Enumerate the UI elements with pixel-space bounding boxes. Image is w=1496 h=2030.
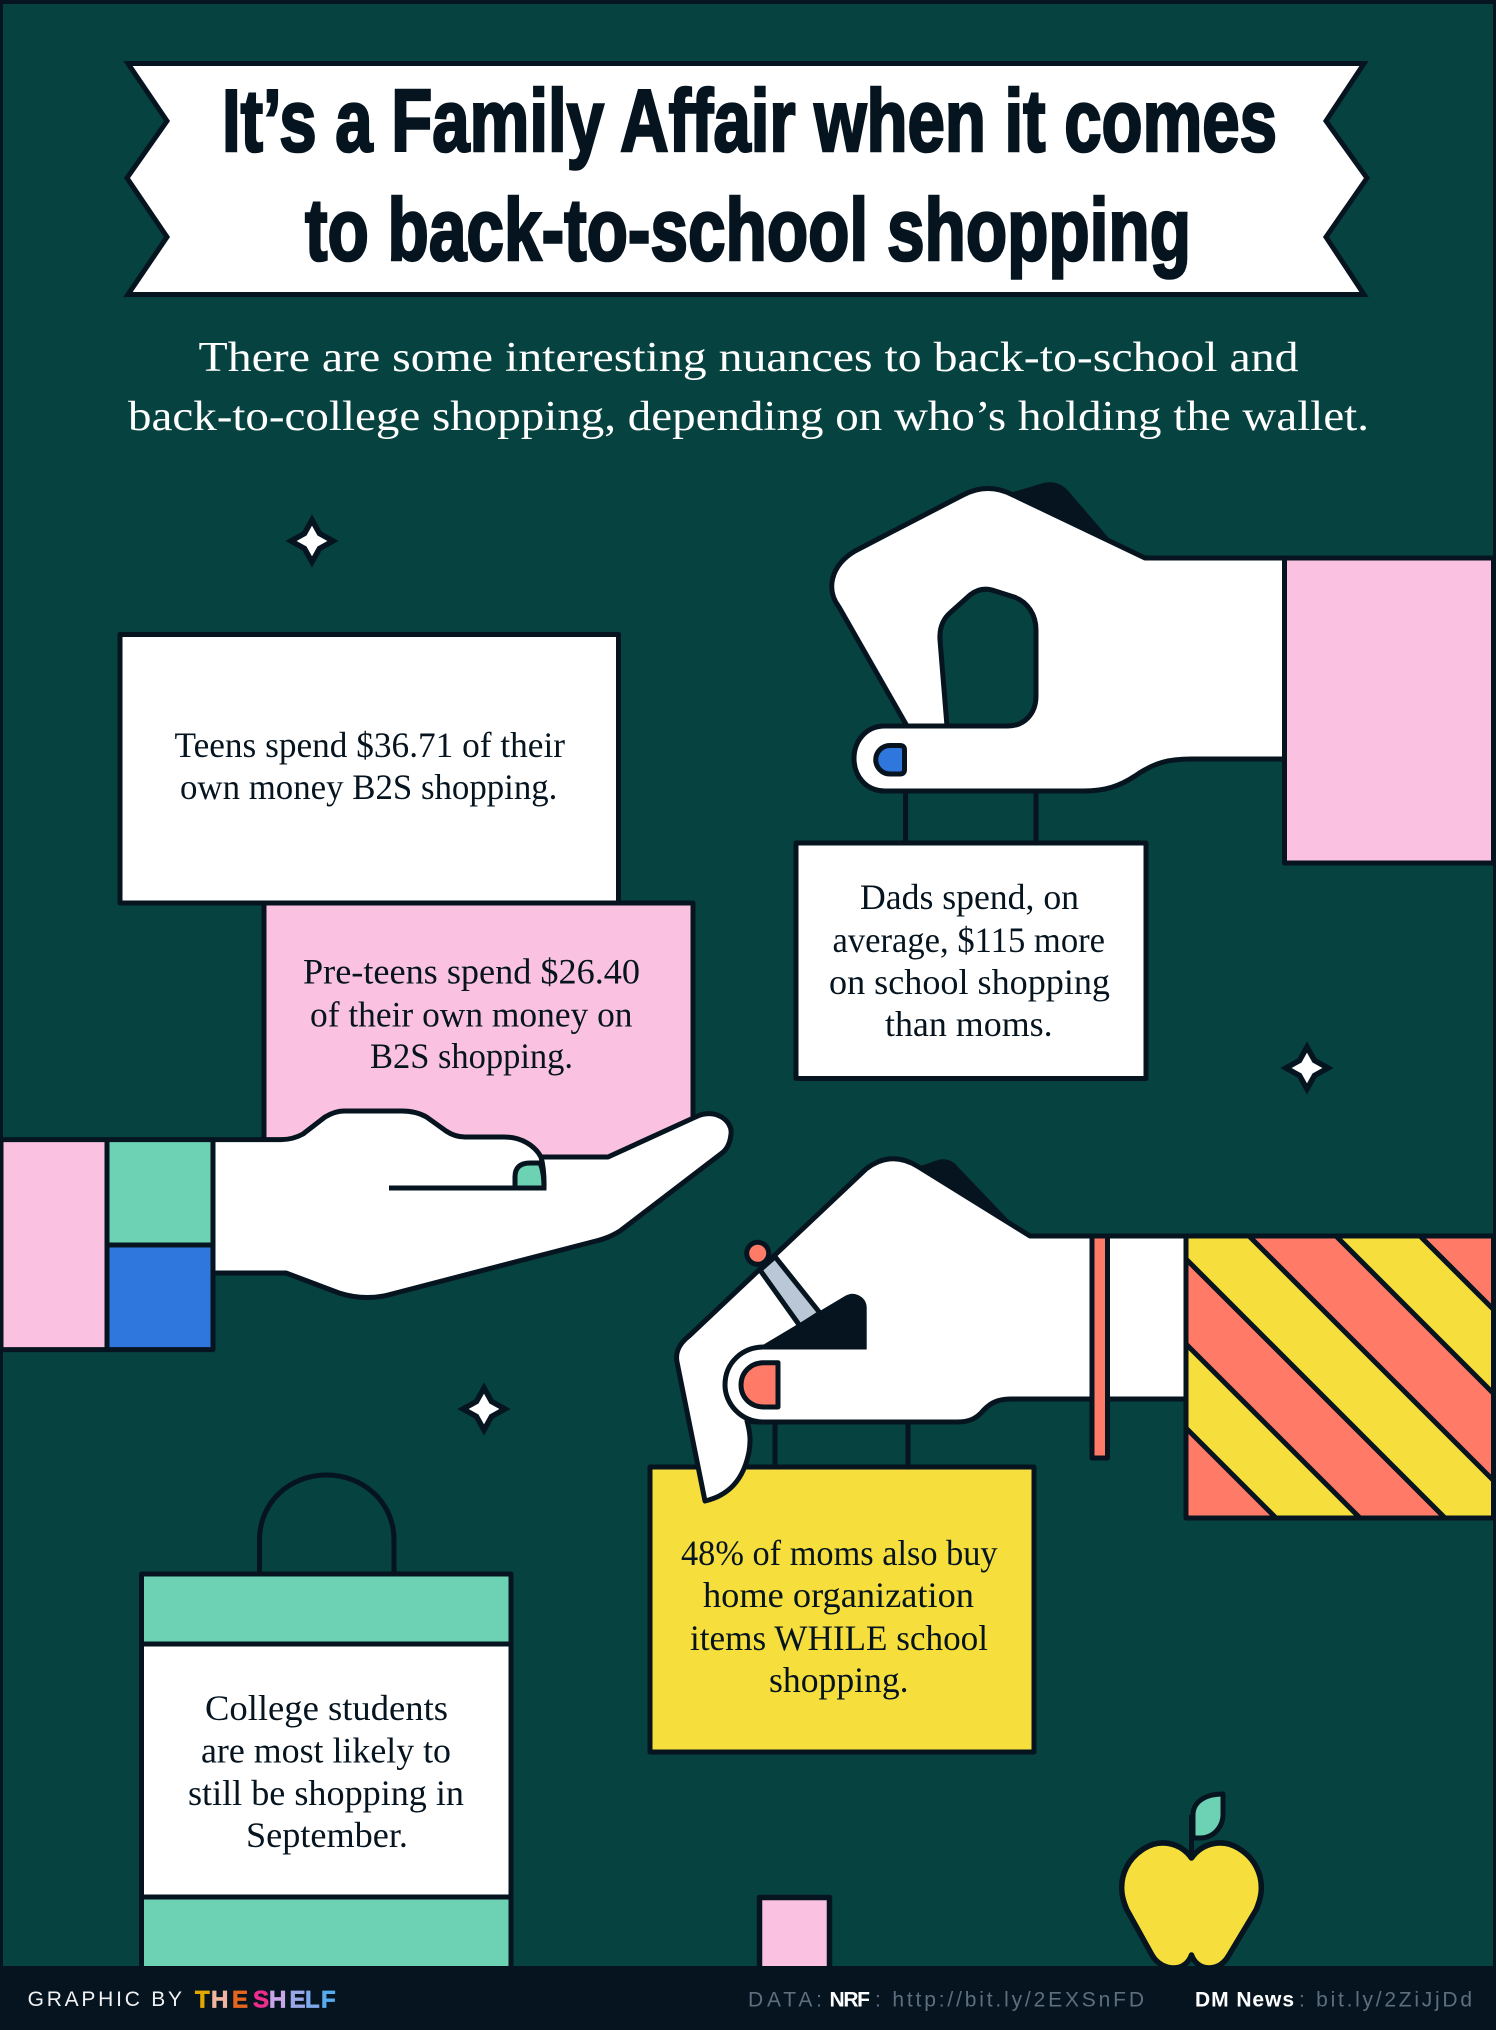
- icon: strings from dad's hand: [906, 788, 1036, 842]
- source: DM News: DM News: [1195, 1988, 1294, 2012]
- hand: [832, 488, 1284, 791]
- logo: the shelf: H: [211, 1986, 228, 2014]
- hand: [677, 1159, 1186, 1501]
- text: pre-teens: Pre-teens spend $26.40: [303, 952, 640, 992]
- icon: sparkle top left: [291, 520, 333, 562]
- text: college students: [188, 1688, 464, 1855]
- cuff: pink, green and blue: [1, 1140, 213, 1350]
- icon: shopping bag: [142, 1475, 511, 1971]
- text: pre-teens: [303, 952, 640, 1076]
- knuckle shadow: [918, 1159, 1022, 1234]
- cuff: pink sleeve top right: [1284, 558, 1494, 863]
- text: teens: [174, 725, 565, 807]
- title text: to back-to-school shopping: [305, 180, 1191, 279]
- icon: mom's hand with ring: [677, 1159, 1186, 1501]
- source: NRF: : http://bit.ly/2EXSnFD: [875, 1988, 1144, 2012]
- text: college students: are most likely to: [201, 1730, 451, 1770]
- subtitle: There are some interesting nuances to back-to-school and: [198, 335, 1298, 381]
- text: college students: College students: [205, 1688, 448, 1728]
- footer: [0, 1966, 1496, 2030]
- ring stone: [747, 1242, 769, 1264]
- credit: [28, 1986, 336, 2014]
- title banner: [127, 64, 1367, 294]
- logo: the shelf: L: [305, 1986, 320, 2014]
- text: moms: home organization: [703, 1575, 974, 1615]
- source: DM News: [1195, 1988, 1472, 2012]
- ring band: [760, 1257, 820, 1326]
- text: teens: Teens spend $36.71 of their: [174, 725, 565, 765]
- bag handle: [260, 1475, 394, 1574]
- source: NRF: NRF: [830, 1988, 870, 2012]
- panel: dads: [796, 843, 1146, 1078]
- logo: the shelf: [195, 1986, 336, 2014]
- text: moms: 48% of moms also buy: [681, 1533, 998, 1573]
- leaf: [1193, 1794, 1223, 1838]
- text: dads: than moms.: [885, 1004, 1053, 1044]
- open hand: [213, 1111, 731, 1297]
- text: dads: Dads spend, on: [860, 877, 1079, 917]
- logo: the shelf: F: [321, 1986, 336, 2014]
- source: NRF: [748, 1988, 1144, 2012]
- knuckle shadow: [1010, 482, 1113, 543]
- text: teens: own money B2S shopping.: [180, 767, 557, 807]
- panel: pre-teens: [264, 903, 693, 1157]
- text: moms: items WHILE school: [690, 1618, 988, 1658]
- apple body: [1122, 1843, 1261, 1968]
- text: college students: still be shopping in: [188, 1773, 464, 1813]
- text: pre-teens: of their own money on: [310, 994, 632, 1034]
- panel: moms: [650, 1467, 1034, 1752]
- logo: the shelf: H: [269, 1986, 286, 2014]
- text: moms: shopping.: [769, 1660, 909, 1700]
- cuff: striped sleeve: [1184, 1234, 1493, 1520]
- icon: apple: [1122, 1794, 1261, 1968]
- text: dads: average, $115 more: [832, 920, 1105, 960]
- icon: sparkle lower left: [463, 1388, 505, 1430]
- panel: college students: [142, 1644, 511, 1897]
- thumbnail: [741, 1363, 778, 1407]
- text: dads: on school shopping: [829, 962, 1110, 1002]
- icon: dad's hand pinching: [832, 482, 1284, 791]
- palm shadow: [760, 1294, 867, 1350]
- logo: the shelf: E: [232, 1986, 248, 2014]
- title text: [222, 71, 1277, 279]
- bag bottom band: [142, 1897, 511, 1971]
- pink block: [760, 1898, 830, 1970]
- bag top band: [142, 1574, 511, 1644]
- source: DM News: : bit.ly/2ZiJjDd: [1299, 1988, 1472, 2012]
- thumbnail: [515, 1163, 544, 1188]
- subtitle: back-to-college shopping, depending on who’s holding the wallet.: [128, 394, 1369, 440]
- thumbnail: [876, 746, 904, 774]
- finger gap: [940, 589, 1036, 726]
- logo: the shelf: E: [290, 1986, 306, 2014]
- icon: open hand with cuff: [1, 1111, 731, 1350]
- credit: GRAPHIC BY: [28, 1988, 182, 2011]
- icon: strings from mom's hand: [775, 1418, 908, 1467]
- text: moms: [681, 1533, 998, 1700]
- subtitle: [128, 335, 1369, 440]
- logo: the shelf: S: [253, 1986, 269, 2014]
- icon: sparkle right: [1286, 1047, 1328, 1089]
- text: pre-teens: B2S shopping.: [370, 1036, 573, 1076]
- source: NRF: DATA:: [748, 1988, 822, 2012]
- text: college students: September.: [246, 1815, 408, 1855]
- text: dads: [829, 877, 1110, 1044]
- thumb: [725, 1347, 800, 1422]
- bracelet strip: [1092, 1236, 1108, 1458]
- logo: the shelf: T: [195, 1986, 210, 2014]
- panel: teens: [120, 634, 618, 903]
